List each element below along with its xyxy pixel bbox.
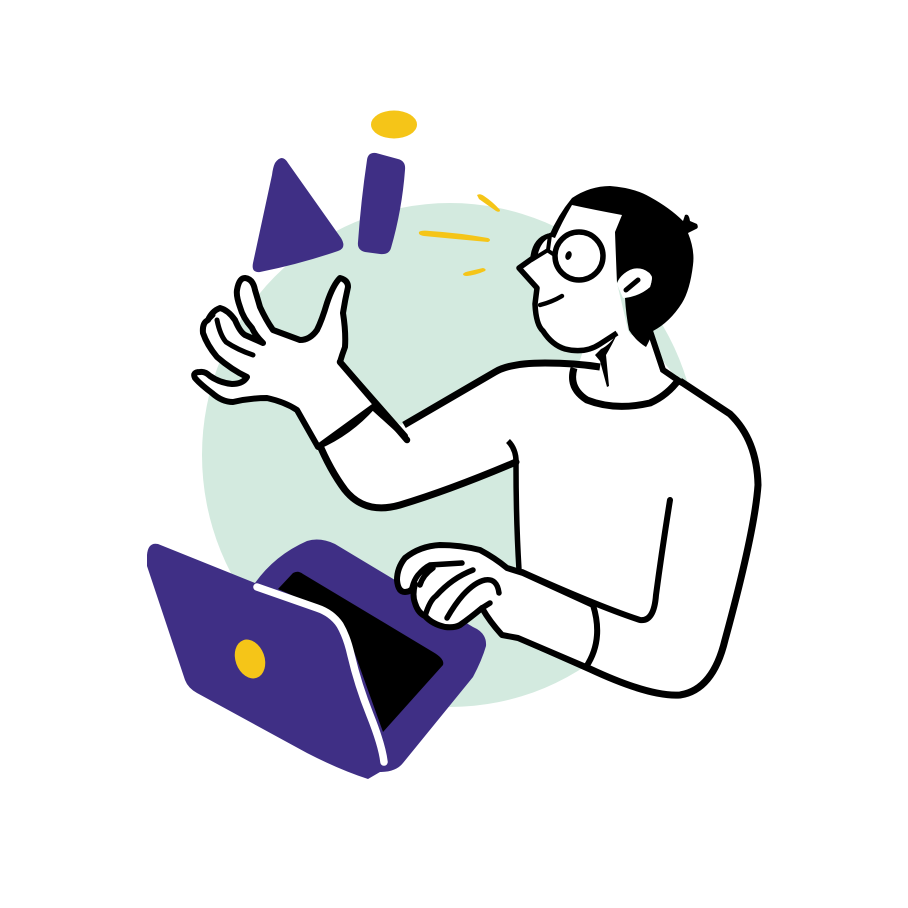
- laptop screen: [278, 572, 443, 732]
- ear detail: [626, 280, 638, 290]
- cuff: raised arm: [318, 407, 373, 447]
- sweater: [318, 345, 757, 695]
- raised arm outline: [318, 441, 516, 508]
- wrist line: [340, 362, 407, 440]
- laptop base and lid: [147, 540, 486, 779]
- icon: info letter i and triangle: [253, 110, 417, 272]
- laptop logo: [230, 635, 270, 683]
- laptop: [147, 540, 486, 779]
- shoulder outline: [404, 363, 600, 425]
- face: [520, 203, 640, 352]
- lid edge: [257, 587, 384, 762]
- sparks: [419, 194, 500, 276]
- head: [519, 186, 698, 387]
- pupil: [564, 250, 573, 261]
- inner arm line: [522, 500, 670, 620]
- glasses temple side lens: [535, 235, 550, 258]
- triangle: [253, 158, 343, 272]
- smile: [540, 296, 562, 305]
- hair: [549, 186, 698, 347]
- glasses bridge: [547, 250, 556, 256]
- person body: [194, 278, 758, 695]
- hand: typing: [397, 545, 597, 667]
- ear: [617, 268, 652, 298]
- background circle: [202, 203, 698, 707]
- glasses: [555, 232, 603, 280]
- back outline: [518, 381, 758, 695]
- neck lines: [650, 331, 682, 383]
- letter i dot: [371, 110, 417, 138]
- hand: raised: [194, 278, 405, 447]
- letter i stem: [358, 153, 405, 254]
- face outline: [519, 236, 617, 351]
- armpit and torso line: [508, 441, 519, 570]
- neck: [575, 330, 665, 405]
- neck shadow: [595, 332, 618, 387]
- finger creases: [208, 315, 253, 355]
- collar: [573, 368, 680, 406]
- fingers: typing: [412, 563, 499, 618]
